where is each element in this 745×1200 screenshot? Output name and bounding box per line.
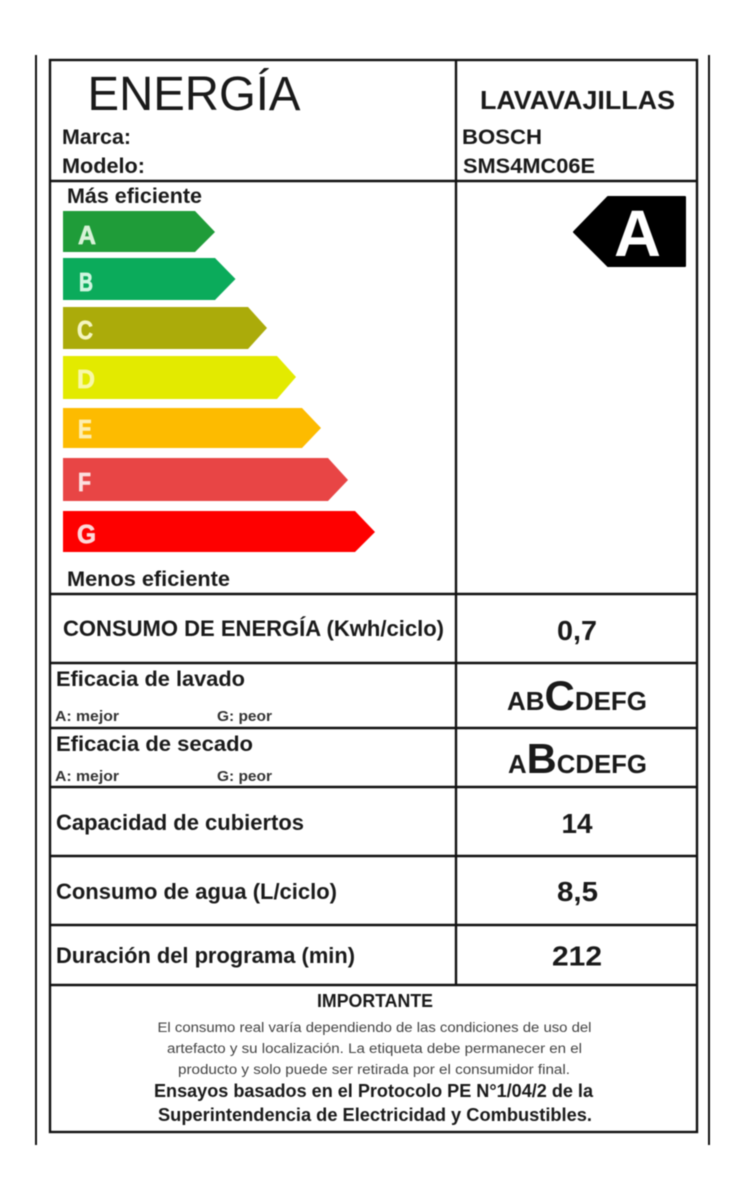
brand value: BOSCH (462, 125, 542, 149)
washing efficiency row: ABCDEFG (507, 672, 647, 719)
important note: artefacto y su localización. La etiqueta debe permanecer en el (167, 1041, 582, 1057)
rating badge A (574, 196, 685, 270)
important note: Ensayos basados en el Protocolo PE N°1/04/2 de la (154, 1081, 594, 1101)
appliance type: LAVAVAJILLAS (480, 85, 675, 115)
water consumption row (56, 876, 598, 907)
arrow C (63, 307, 267, 349)
energy consumption row: CONSUMO DE ENERGÍA (Kwh/ciclo) (63, 616, 444, 641)
important note (154, 990, 594, 1125)
cutlery capacity row (56, 808, 593, 839)
arrow C: C (77, 315, 93, 345)
arrow G: G (77, 519, 96, 549)
brand label: Marca: (62, 125, 131, 149)
title: ENERGÍA (88, 68, 300, 121)
cutlery capacity row: Capacidad de cubiertos (56, 810, 304, 835)
arrow E: E (78, 414, 92, 444)
important note: El consumo real varía dependiendo de las condiciones de uso del (158, 1020, 592, 1036)
drying efficiency row: Eficacia de secado (56, 732, 253, 756)
arrow B: B (79, 267, 93, 297)
drying efficiency row: A: mejor (55, 769, 119, 785)
energy consumption row: 0,7 (557, 615, 597, 646)
label table frame (50, 60, 697, 1132)
least efficient label: Menos eficiente (67, 567, 230, 591)
arrow D (63, 356, 296, 399)
cutlery capacity row: 14 (562, 808, 593, 839)
important note: Superintendencia de Electricidad y Combustibles. (158, 1105, 592, 1125)
model label: Modelo: (62, 154, 145, 178)
rating badge A: A (614, 196, 661, 270)
most efficient label: Más eficiente (67, 184, 202, 208)
arrow E (63, 408, 321, 448)
arrow F (63, 458, 348, 501)
programme duration row: Duración del programa (min) (56, 943, 355, 968)
arrow B (63, 258, 236, 300)
washing efficiency row (55, 667, 647, 725)
washing efficiency row: A: mejor (55, 709, 119, 725)
arrow G (63, 511, 375, 552)
arrow A: A (78, 220, 96, 250)
water consumption row: 8,5 (557, 876, 598, 907)
washing efficiency row: G: peor (217, 709, 272, 725)
drying efficiency row (55, 732, 647, 785)
model value: SMS4MC06E (463, 154, 595, 178)
programme duration row (56, 940, 602, 972)
water consumption row: Consumo de agua (L/ciclo) (56, 879, 337, 904)
energy consumption row (63, 615, 597, 646)
important note: IMPORTANTE (317, 990, 433, 1011)
washing efficiency row: Eficacia de lavado (56, 667, 245, 691)
arrow A (63, 211, 215, 252)
drying efficiency row: ABCDEFG (508, 735, 647, 782)
programme duration row: 212 (552, 940, 602, 972)
arrow D: D (77, 364, 95, 394)
drying efficiency row: G: peor (217, 769, 272, 785)
important note: producto y solo puede ser retirada por el consumidor final. (178, 1062, 570, 1078)
energy scale arrows (63, 211, 375, 552)
arrow F: F (78, 467, 91, 497)
